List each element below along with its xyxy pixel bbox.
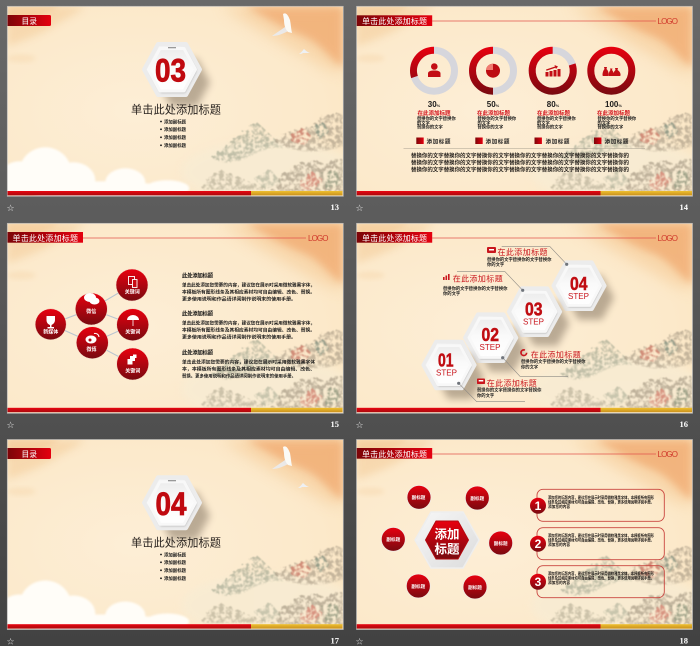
- stat column 30%: 替换你的文字: [417, 124, 443, 130]
- stat column 100%: 的文字: [598, 120, 611, 126]
- slide 15: keyword network: [6, 223, 357, 431]
- satellite circle 3: [381, 527, 405, 551]
- sub-item list: 添加副标题: [164, 551, 187, 558]
- callout 01: 替换你的文字替换你的文字替换你: [477, 387, 542, 394]
- bottom bar: [357, 191, 692, 195]
- step 01 hexagon: 01: [438, 350, 454, 370]
- satellite circle 2: 副标题: [470, 495, 485, 502]
- callout 04: 替换你的文字替换你的文字替换你: [487, 256, 552, 263]
- icon: rising bars: [546, 65, 560, 76]
- list item 3: 添加您的内容: [548, 579, 571, 586]
- page number: 17: [330, 636, 340, 646]
- stat column 30%: 的文字: [417, 120, 431, 126]
- sub-item list: 添加副标题: [164, 567, 187, 574]
- stat column 80%: [534, 100, 576, 145]
- stat column 80%: 替换你的文字: [537, 124, 563, 130]
- slide 18 background: [356, 440, 700, 638]
- callout 03: 在此添加标题: [453, 274, 503, 284]
- satellite circle 1: 副标题: [412, 494, 426, 501]
- icon: umbrella: [127, 315, 139, 326]
- node: keyword middle: [117, 309, 149, 341]
- satellite circle 4: [489, 531, 513, 555]
- callout 04: [487, 247, 568, 268]
- callout 01: 你的文字: [477, 392, 495, 399]
- callout 02: 替换你的文字替换你的文字替换你: [521, 358, 586, 365]
- slide 18: hub and list: [356, 440, 700, 646]
- callout 04: 你的文字: [487, 261, 505, 268]
- callout 04: 在此添加标题: [498, 247, 548, 257]
- text block 2: 此处添加标题: [182, 310, 214, 318]
- text block 3: 替换。更多使用说明和作品请详阅制作说明末的使用手册。: [182, 372, 296, 380]
- ring 80%: [532, 50, 573, 91]
- stat column 50%: 在此添加标题: [477, 109, 510, 117]
- text block 1: 本模板所有图形线条及其相应素材均可自由编辑、改色、替换。: [182, 288, 315, 296]
- stat column 30%: 30%: [428, 100, 441, 109]
- callout 03: [443, 272, 524, 297]
- sub-item list: 添加副标题: [164, 575, 187, 582]
- paragraph: 替换你的文字替换你的文字替换你的文字替换你的文字替换你的文字替换你的文字替换你的: [411, 165, 630, 173]
- bottom bar: [357, 408, 692, 412]
- number hexagon 03: [144, 44, 210, 106]
- satellite circle 5: [406, 574, 430, 598]
- satellite circle 6: [463, 575, 487, 599]
- list item 3: 3: [535, 575, 542, 589]
- stat column 100%: [594, 100, 637, 145]
- stat column 80%: 添加标题: [546, 137, 570, 145]
- text block 2: 单击此处添加您需要的内容，建议您在展示时采用微软雅黑字体，: [182, 320, 315, 326]
- stat column 100%: 在此添加标题: [597, 109, 630, 117]
- text block 1: 单击此处添加您需要的内容，建议您在展示时采用微软雅黑字体，: [182, 282, 315, 288]
- central hexagon: 添加: [434, 526, 460, 542]
- slide 17 background: [0, 440, 357, 638]
- central hexagon: [415, 512, 479, 568]
- step 04 hexagon: [553, 262, 614, 320]
- sub-item list: 添加副标题: [164, 142, 187, 149]
- number hexagon 03: 03: [155, 53, 186, 89]
- page number: 15: [330, 419, 339, 429]
- node: media: 新媒体: [43, 328, 58, 336]
- sub-item list: [160, 118, 187, 149]
- sub-item list: 添加副标题: [164, 126, 187, 133]
- page number: 16: [680, 419, 688, 429]
- page number: 13: [330, 202, 339, 212]
- central hexagon: 标题: [434, 542, 460, 556]
- stat column 80%: 替换你的文字替换你: [537, 115, 576, 122]
- stat column 100%: 100%: [605, 100, 622, 109]
- text block 2: [182, 310, 315, 340]
- step 02 hexagon: STEP: [480, 343, 500, 352]
- stat column 30%: 在此添加标题: [417, 109, 451, 117]
- contents tag: 目录: [22, 450, 37, 459]
- list item 1: 1: [535, 499, 542, 513]
- text block 1: [182, 272, 315, 302]
- text block 2: 本模板所有图形线条及其相应素材均可自由编辑、改色、替换。: [182, 326, 315, 334]
- icon: weibo: [86, 333, 99, 344]
- list item 1: 线条及其相应素材均可自由编辑、改色、替换，更多使用说明详阅手册。: [548, 498, 654, 505]
- satellite circle 1: [407, 485, 431, 509]
- header: 单击此处添加标题: [362, 233, 427, 243]
- paragraph: 替换你的文字替换你的文字替换你的文字替换你的文字替换你的文字替换你的文字替换你的: [411, 151, 630, 159]
- node: keyword middle: 关键词: [125, 328, 140, 336]
- stat column 80%: 在此添加标题: [537, 109, 570, 117]
- footer star: ☆: [356, 204, 364, 214]
- text block 3: 本，本模板所有图形线条及其相应素材均可自由编辑、改色、: [182, 366, 315, 372]
- header: [8, 232, 328, 243]
- page number: 14: [680, 202, 689, 212]
- icon: doves: [272, 13, 310, 54]
- text block 2: 更多使用说明和作品请详阅制作说明末的使用手册。: [182, 334, 296, 340]
- list item 3: [530, 566, 664, 598]
- slide 14: progress rings: [356, 6, 700, 214]
- list item 2: 添加您的内容: [548, 541, 571, 548]
- satellite circle 6: 副标题: [468, 584, 482, 591]
- callout 03: 你的文字: [443, 290, 461, 297]
- stat column 100%: 添加标题: [604, 137, 629, 145]
- satellite circle 4: 副标题: [494, 540, 508, 547]
- list item 2: 线条及其相应素材均可自由编辑、改色、替换，更多使用说明详阅手册。: [548, 536, 654, 544]
- header: 单击此处添加标题: [12, 233, 78, 243]
- stat column 80%: 80%: [547, 100, 560, 109]
- step 04 hexagon: 04: [570, 274, 588, 294]
- stat column 100%: 替换你的文字: [598, 124, 624, 130]
- icon: swirl: [521, 350, 527, 356]
- footer star: ☆: [6, 204, 15, 214]
- icon: trophy: [46, 316, 55, 328]
- icon: chat bubbles: [84, 293, 100, 304]
- sub-item list: 添加副标题: [164, 134, 187, 141]
- list item 2: 添加您的标题内容，建议您在展示时采用微软雅黑字体，本模板所有图形: [548, 532, 655, 539]
- node: keyword top: [116, 269, 148, 301]
- stat column 50%: 替换你的文字替换你: [478, 115, 517, 122]
- contents tag: [8, 15, 51, 26]
- bottom bar: [357, 624, 692, 629]
- step 04 hexagon: STEP: [568, 292, 589, 301]
- node: wechat: [75, 293, 107, 325]
- header: [357, 232, 678, 243]
- slide 13: section divider 03: [0, 6, 357, 214]
- satellite circle 3: 副标题: [386, 536, 401, 543]
- icon: devices: [128, 276, 137, 288]
- text block 3: 单击此处添加您需要的内容，建议您在展示时采用微软雅黑字体: [182, 358, 315, 366]
- header: LOGO: [308, 234, 328, 243]
- slide 16 background: [356, 223, 700, 421]
- paragraph: 替换你的文字替换你的文字替换你的文字替换你的文字替换你的文字替换你的文字替换你的: [411, 158, 630, 166]
- text block 1: 更多使用说明和作品请详阅制作说明末的使用手册。: [182, 296, 296, 302]
- step 02 hexagon: [465, 314, 526, 372]
- number hexagon 04: [144, 477, 210, 540]
- header: [357, 15, 678, 26]
- callout 01: 在此添加标题: [487, 378, 537, 388]
- footer star: ☆: [6, 421, 15, 431]
- sub-item list: [160, 551, 187, 582]
- stat column 80%: 的文字: [537, 120, 551, 126]
- bottom bar: [8, 191, 342, 195]
- stat column 50%: 的文字: [478, 120, 491, 126]
- bottom bar: [8, 624, 342, 629]
- icon: pages: [128, 354, 136, 364]
- text block 3: 此处添加标题: [182, 349, 214, 357]
- stat column 100%: 替换你的文字替换你: [598, 115, 637, 122]
- section title: 单击此处添加标题: [131, 102, 221, 116]
- node: keyword bottom: [117, 348, 149, 380]
- callout 03: 替换你的文字替换你的文字替换你: [443, 285, 508, 292]
- step 03 hexagon: STEP: [523, 318, 544, 326]
- header: 单击此处添加标题: [362, 449, 427, 459]
- footer star: ☆: [356, 421, 364, 431]
- satellite circle 2: [465, 486, 489, 510]
- header: LOGO: [658, 17, 678, 26]
- list item 3: 添加您的标题内容，建议您在展示时采用微软雅黑字体，本模板所有图形: [548, 570, 655, 577]
- node: keyword top: 关键词: [125, 288, 140, 296]
- callout 02: 在此添加标题: [531, 350, 581, 360]
- section title: 单击此处添加标题: [131, 536, 221, 550]
- contents tag: [8, 448, 51, 459]
- node: keyword bottom: 关键词: [125, 368, 140, 374]
- contents tag: 目录: [22, 17, 37, 26]
- step 03 hexagon: [509, 288, 569, 346]
- callout 01: [457, 378, 542, 402]
- list item 1: 添加您的内容: [548, 503, 571, 510]
- text block 3: [182, 349, 315, 380]
- icon: monitor: [487, 247, 496, 253]
- header: [357, 448, 678, 459]
- ring 30%: [414, 50, 454, 91]
- sub-item list: 添加副标题: [164, 118, 187, 125]
- list item 1: 添加您的标题内容，建议您在展示时采用微软雅黑字体，本模板所有图形: [548, 494, 655, 501]
- header: LOGO: [658, 450, 678, 459]
- header: LOGO: [658, 234, 678, 243]
- slide 14 background: [356, 6, 700, 204]
- ring 100%: [591, 50, 632, 91]
- list item 2: 2: [535, 537, 542, 551]
- icon: person: [428, 63, 440, 77]
- icon: doves: [272, 446, 309, 488]
- bottom bar: [8, 408, 342, 412]
- step 01 hexagon: [423, 342, 484, 399]
- stat column 50%: 50%: [487, 100, 500, 109]
- stat column 30%: 添加标题: [426, 137, 451, 145]
- node: wechat: 微信: [86, 308, 96, 315]
- stat column 50%: [475, 100, 517, 145]
- sub-item list: 添加副标题: [164, 559, 187, 566]
- slide 16: four steps: [356, 223, 700, 431]
- step 01 hexagon: STEP: [436, 368, 457, 378]
- callout 02: [501, 350, 586, 376]
- list item 3: 线条及其相应素材均可自由编辑、改色、替换，更多使用说明详阅手册。: [548, 574, 654, 582]
- header: 单击此处添加标题: [362, 16, 427, 26]
- stat column 30%: [416, 100, 456, 145]
- icon: pie: [486, 64, 500, 78]
- node: media: [35, 309, 66, 340]
- icon: small bars: [443, 274, 450, 280]
- list item 1: [530, 489, 664, 521]
- stat column 30%: 替换你的文字替换你: [417, 115, 456, 122]
- stat column 50%: 添加标题: [486, 137, 510, 145]
- step 02 hexagon: 02: [482, 325, 499, 345]
- slide 13 background: [0, 6, 357, 204]
- paragraph: [411, 151, 630, 173]
- node: weibo: 微博: [86, 346, 97, 353]
- stat column 50%: 替换你的文字: [478, 124, 504, 130]
- text block 1: 此处添加标题: [182, 272, 214, 280]
- network connectors: [51, 285, 133, 364]
- slide 15 background: [7, 223, 357, 421]
- step 03 hexagon: 03: [525, 300, 542, 320]
- node: weibo: [76, 327, 108, 359]
- slide 17: section divider 04: [0, 440, 357, 646]
- icon: money bags: [602, 67, 621, 76]
- ring 50%: [472, 50, 514, 91]
- number hexagon 04: 04: [156, 486, 187, 522]
- page number: 18: [680, 636, 688, 646]
- list item 2: [530, 528, 664, 560]
- callout 02: 你的文字: [521, 363, 539, 370]
- icon: screen: [477, 378, 485, 384]
- satellite circle 5: 副标题: [411, 583, 426, 590]
